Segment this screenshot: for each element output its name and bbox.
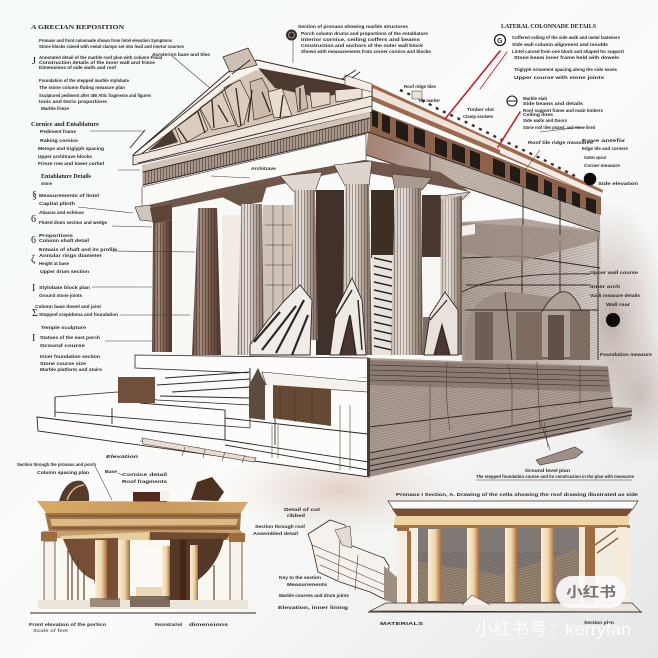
temple base front [37, 355, 369, 477]
note group 4: Height at base [39, 261, 70, 266]
columns [397, 527, 627, 603]
note group 1: Marble frieze [41, 106, 70, 111]
lower left temple labels: dimensions [189, 622, 229, 627]
margin marks: I [32, 283, 35, 294]
note group 1: Dimensions of side walls and roof [39, 65, 117, 70]
lower right temple labels: Section plan [584, 620, 614, 625]
right side wall interior [462, 218, 601, 372]
top right notes: Roof support frame and main timbers [523, 108, 604, 113]
note group 1 [39, 38, 185, 111]
note group 2: Frieze row and lower corbel [38, 161, 104, 166]
note group 4: Temple sculpture [41, 325, 87, 330]
note group 1: Pronaos and front colonnade shown from lintel elevation Symptoms [39, 38, 173, 43]
top right notes: Lintel carved from one block and shaped for support [512, 49, 625, 54]
column 3 [237, 204, 264, 355]
lower caption right of base: The stepped foundation course and its construction in the plan with measures [476, 474, 635, 479]
icon: round seal [286, 30, 297, 40]
lower left temple labels: Roof fragments [122, 479, 168, 484]
margin marks: ζ [31, 254, 35, 265]
plinth [368, 595, 642, 612]
centre section detail: Detail of cut [284, 507, 321, 512]
lower caption right of base [476, 422, 635, 480]
lower left temple labels: Elevation [106, 454, 139, 459]
pediment with broken sculptures [130, 48, 372, 158]
main title: A GRECIAN REPOSITION [31, 24, 124, 31]
statues [250, 278, 458, 355]
top right notes: Top marker [418, 98, 440, 103]
centre section detail [253, 507, 400, 610]
centre section detail: Section through roof [255, 524, 306, 529]
note group 2: Pediment frame [40, 129, 77, 134]
note group 1: Ionic and Doric proportions [39, 99, 108, 104]
note group 4: Column shaft detail [39, 238, 89, 243]
top right notes: Timber slot [467, 107, 495, 112]
note group 1: Sculptured pediment after 480 Attic fragments and figures [39, 93, 152, 98]
centre section detail: Measurements [287, 582, 328, 587]
column 5 [342, 184, 372, 355]
top right notes: Roof tile ridge measures [528, 140, 594, 145]
left notes panel [31, 24, 185, 372]
note group 1: Foundation of the stepped marble stylobate [39, 78, 130, 83]
top right notes: Ceiling lines [523, 112, 554, 117]
margin marks: J [32, 56, 36, 67]
lower left temple elevation [30, 477, 256, 613]
column 4 [290, 190, 318, 340]
icon: black dot upper [584, 173, 596, 185]
top right notes: Upper course with stone joints [514, 75, 605, 80]
watermark text: 小红书号：kerryfan [475, 620, 631, 639]
note group 2: Upper architrave blocks [38, 154, 93, 159]
back wall [400, 525, 630, 605]
watermark pill: 小红书 [566, 584, 616, 600]
top centre note: Section of pronaos showing marble structures [298, 24, 409, 29]
red leader lines [445, 51, 520, 147]
note group 3: Fluted drum section and wedge [39, 220, 108, 225]
top centre note: Porch column drums and proportions of the entablature [301, 31, 429, 36]
top right notes: Side walls and Doors [523, 118, 568, 123]
note group 3: Entablature Details [41, 173, 91, 180]
note group 4: Entasis of shaft and its profile [39, 247, 118, 252]
top right notes: Inner arch [590, 284, 621, 289]
margin marks [31, 56, 38, 344]
temple base right side [367, 358, 632, 477]
top right notes: Triglyph ornament spacing along the side eaves [514, 67, 618, 72]
lower right temple labels: MATERIALS [380, 621, 423, 626]
lower left temple labels: Column spacing plan [37, 470, 89, 475]
top right notes: Wall rear [606, 302, 630, 307]
capitals and under-entablature [135, 160, 470, 224]
note group 4: Stepped crepidoma and foundation [39, 312, 118, 317]
white architrave [142, 134, 366, 207]
note group 2: Metope and triglyph spacing [38, 146, 104, 151]
note group 4: Inner foundation section [40, 354, 100, 359]
note group 1: Stone blocks raised with metal clamps set into lead and mortar courses [39, 44, 185, 49]
metope windows [372, 110, 596, 214]
note group 2: Cornice and Entablature [31, 121, 99, 128]
note group 4: Proportions [39, 233, 74, 238]
top centre note: Acroterion base and tiles [152, 52, 211, 57]
note group 4: Marble platform and stairs [40, 367, 103, 372]
lower left temple labels: Scale of feet [33, 628, 69, 633]
centre section detail: ribbed [287, 513, 305, 518]
note group 3: Measurements of lintel [39, 193, 99, 198]
centre section detail: Assembled detail [253, 531, 298, 536]
note group 4: Ground stone joints [39, 293, 83, 298]
lower left temple labels [17, 454, 229, 633]
top right notes: Side wall column alignment and moulds [512, 42, 609, 47]
top right notes: Corner measure [584, 163, 621, 168]
note group 3: Abacus and echinus [39, 210, 85, 215]
column 6 [391, 188, 423, 355]
lower left temple labels: Cornice detail [122, 472, 167, 477]
note group 3: Capital plinth [39, 201, 75, 206]
tympanum stones [175, 78, 362, 145]
margin marks: 6 [31, 235, 36, 246]
top right notes: Stone beam inner frame held with dowels [514, 55, 620, 60]
column 7 [440, 196, 462, 355]
centre section detail: Marble courses and drum joints [279, 593, 350, 598]
note group 4 [35, 233, 118, 372]
lower right temple elevation [368, 501, 642, 612]
lower right temple labels [380, 492, 639, 626]
stone block [118, 377, 155, 403]
top centre note [152, 24, 432, 171]
roof ornaments [400, 90, 575, 176]
top right notes: Foundation measure [600, 352, 653, 357]
column 2 [192, 208, 221, 355]
base with inscriptions [30, 596, 256, 613]
note group 1: The stone column fluting measure plan [39, 85, 125, 90]
top right notes: Edge tile and corners [582, 146, 629, 151]
top right notes [404, 23, 653, 357]
top centre note: Construction and anchors of the outer wall block [301, 43, 424, 48]
lower left temple labels: Front elevation of the portico [29, 622, 106, 627]
icon: black dot lower [606, 313, 620, 327]
note group 2: Raking cornice [40, 138, 79, 143]
heading: LATERAL COLONNADE DETAILS [501, 23, 596, 30]
top right notes: Vault measure details [590, 293, 641, 298]
top right notes: Side elevation [598, 181, 639, 186]
note group 2 [31, 121, 104, 166]
note group 3: stone [41, 181, 53, 186]
margin marks: I [32, 333, 35, 344]
top centre note: Interior cornice, ceiling coffers and beams [301, 37, 421, 42]
lower left temple labels: Section through the pronaos and porch [17, 462, 96, 467]
doorway [262, 372, 368, 426]
note group 4: Statues of the east porch [40, 335, 100, 340]
leader lines [78, 40, 582, 341]
centre section detail: Elevation, inner lining [278, 605, 349, 610]
icon: numbered circle [494, 34, 506, 46]
watermark pill [556, 576, 626, 608]
top right notes: Roof ridge tiles [404, 84, 437, 89]
lower right temple labels: Pronaos I Section, A. Drawing of the cella showing the roof drawing illustrated as side [396, 492, 639, 497]
note group 1: Construction details of the inner wall and frieze [39, 60, 156, 65]
lower caption right of base: Ground level plan [525, 468, 570, 473]
margin marks: 6 [31, 214, 36, 225]
note group 4: Stone course size [40, 361, 87, 366]
note group 4: Ground course [40, 343, 86, 348]
main temple illustration [37, 48, 632, 477]
top right notes: Gutter spout [584, 155, 606, 160]
note group 3 [39, 173, 108, 225]
entablature [42, 513, 246, 544]
frieze and cornice [133, 96, 372, 186]
margin marks: Σ [32, 308, 38, 319]
top right notes: Clamp sockets [463, 114, 494, 119]
columns [152, 184, 462, 355]
lower left temple labels: Base [105, 469, 118, 474]
columns [41, 532, 245, 608]
top centre note: Shown with measurements from corner cornice and blocks [301, 49, 432, 54]
roof side cornice and metopes [366, 84, 603, 235]
dark vault [60, 538, 230, 605]
centre section detail: Key to the section [279, 575, 321, 580]
margin marks: § [32, 190, 37, 201]
top right notes: Marble slab [523, 96, 547, 101]
top right notes: Eave antefix [582, 138, 626, 143]
note group 1: Annotated detail of the marble roof plan with column Finial [39, 55, 162, 60]
icon: e circle [507, 96, 517, 106]
top right notes: Stone roof tiles placed, and stone lined [523, 125, 595, 130]
note group 4: Column base dowel and joint [35, 304, 102, 309]
note group 4: Stylobate block plan [39, 285, 90, 290]
top right notes: Side beams and details [523, 101, 584, 106]
top centre note: Architrave [251, 166, 277, 171]
note group 4: Annular rings diameter [39, 253, 102, 258]
stele [249, 368, 266, 420]
top right notes: Upper wall course [590, 270, 639, 275]
icon: numbered circle: G [497, 38, 503, 45]
lower left temple labels: Reconstructed [155, 622, 182, 627]
top right notes: Coffered ceiling of the side walk and metal fasteners [512, 35, 621, 40]
rooftop fragments [59, 477, 224, 502]
note group 4: Upper drum section [40, 269, 89, 274]
roof slab [37, 501, 248, 513]
column 1 [152, 220, 172, 352]
roof and beam [388, 501, 638, 528]
dark interior behind columns [172, 190, 441, 355]
